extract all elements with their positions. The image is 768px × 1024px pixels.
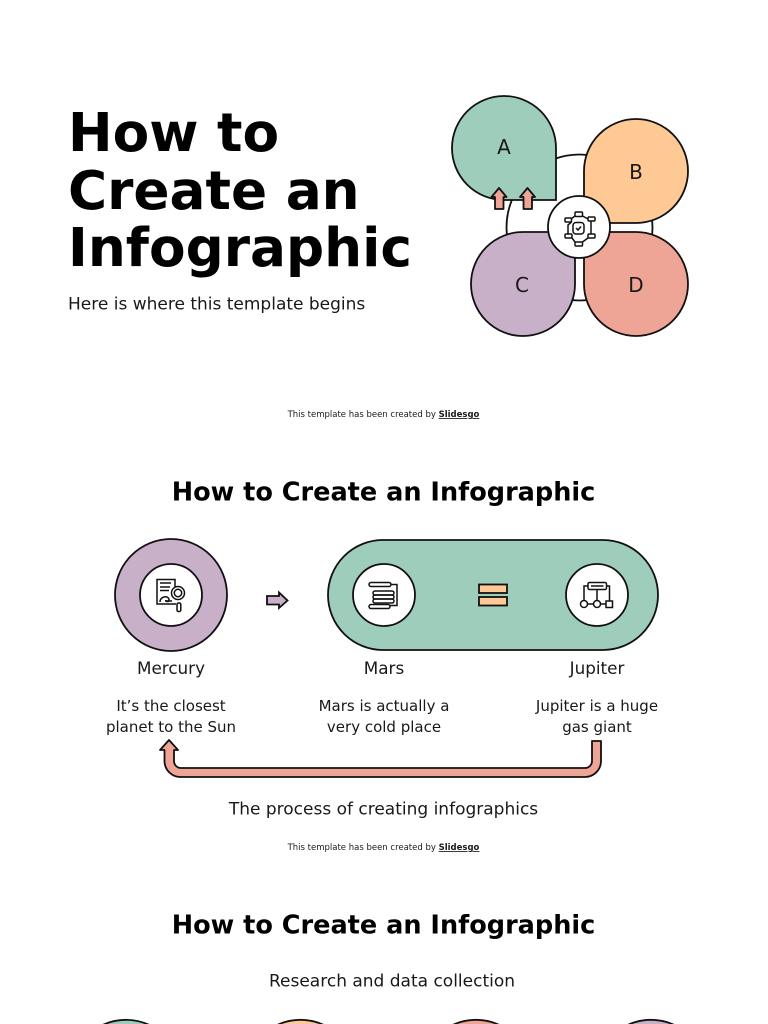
circle 2 (277, 1020, 324, 1024)
subheading: Research and data collection (269, 972, 515, 992)
Mars and Jupiter pill (328, 540, 658, 650)
text: Mars description: Mars is actually a (319, 697, 449, 715)
Jupiter icon circle (566, 564, 628, 626)
diagram: four petals (452, 96, 688, 336)
text: Jupiter description (535, 697, 658, 736)
Mercury ring (115, 539, 227, 651)
Mars icon circle (353, 564, 415, 626)
circle 3 (452, 1020, 500, 1024)
heading: section 3: How to Create an Infographic (172, 910, 595, 940)
circle 1 (102, 1020, 150, 1024)
label: Mars: Mars (364, 658, 404, 678)
centre circle (548, 196, 610, 258)
text: Mars description: very cold place (327, 718, 441, 736)
caption: The process of creating infographics (228, 800, 538, 820)
circle 4 (628, 1020, 674, 1024)
title (68, 102, 412, 279)
arrow: Mercury to Mars (267, 592, 288, 608)
equals sign (479, 584, 507, 606)
petal D: D (628, 273, 644, 297)
icon: document with magnifier (157, 580, 184, 612)
text: Mars description (319, 697, 449, 736)
petal B: B (629, 160, 643, 184)
credit line 1: This template has been created by Slidesgo (287, 410, 480, 420)
text: Jupiter description: Jupiter is a huge (535, 697, 658, 715)
subtitle: Here is where this template begins (68, 294, 365, 314)
label: Jupiter: Jupiter (569, 658, 624, 678)
title: Create an (68, 160, 360, 222)
arrow: up left (492, 188, 506, 209)
backing circle (506, 154, 652, 300)
icon: chip with shield (565, 212, 595, 246)
petal A: A (497, 135, 511, 159)
cropped circles row (102, 1020, 674, 1024)
heading: section 2: How to Create an Infographic (172, 478, 595, 508)
petal C: C (515, 273, 529, 297)
title: How to (68, 102, 279, 164)
label: Mercury: Mercury (137, 658, 205, 678)
petal A (452, 96, 556, 200)
arrow: return loop (160, 740, 601, 777)
text: Mercury description (106, 697, 236, 736)
petal C (471, 232, 575, 336)
text: Mercury description: It’s the closest (116, 697, 226, 715)
credit line 2: This template has been created by Slidesgo (287, 843, 480, 853)
petal B (584, 119, 688, 223)
title: Infographic (68, 217, 412, 279)
arrow: up right (520, 188, 535, 209)
text: Jupiter description: gas giant (562, 718, 632, 736)
text: Mercury description: planet to the Sun (106, 718, 236, 736)
petal D (584, 232, 688, 336)
